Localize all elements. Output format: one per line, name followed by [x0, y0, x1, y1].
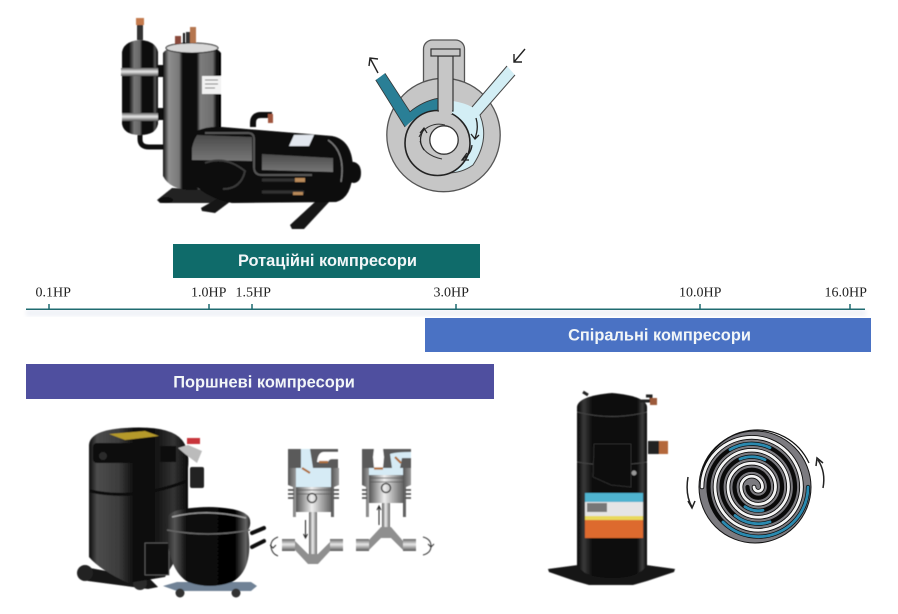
gray disc — [699, 431, 811, 543]
flow arrows — [462, 118, 479, 160]
crankshaft — [368, 527, 403, 551]
terminal box — [593, 444, 631, 487]
label 16.0HP: 16.0HP — [824, 286, 867, 300]
cylinder head — [288, 449, 338, 468]
cylinder walls — [288, 468, 296, 517]
rotary compressor photo — [121, 18, 361, 229]
label 0.1HP: 0.1HP — [36, 286, 71, 300]
cylinder walls — [362, 468, 369, 517]
piston — [296, 487, 331, 512]
crankshaft — [295, 541, 331, 564]
bar: piston compressors — [26, 364, 494, 399]
bar: rotary compressors — [173, 244, 480, 278]
outlet arrow — [369, 58, 378, 73]
label 1.0HP: 1.0HP — [191, 286, 227, 300]
shaft eccentric — [430, 126, 458, 154]
rotation arrow — [270, 537, 278, 556]
reciprocating compressors photo — [77, 428, 264, 598]
rotation arrow — [423, 537, 434, 555]
orbiting scroll black — [708, 444, 808, 537]
outlet channel teal — [376, 73, 438, 127]
base plate — [548, 565, 675, 585]
body — [577, 393, 647, 578]
bar: rotary compressors: Ротаційні компресори — [238, 252, 417, 270]
bar: piston compressors: Поршневі компресори — [173, 374, 355, 392]
rotation arrow — [420, 128, 427, 150]
scroll compressor photo — [548, 392, 675, 585]
fixed scroll black and white — [702, 437, 802, 530]
rotary compressor diagram — [369, 40, 525, 192]
connecting rod — [382, 503, 390, 531]
gas chamber — [369, 468, 403, 475]
gas chamber — [296, 468, 331, 487]
right rotation arrow — [816, 458, 824, 488]
bar: scroll compressors — [425, 318, 871, 352]
small compressor — [145, 507, 264, 598]
piston diagram: intake stroke — [270, 449, 343, 564]
piston diagram: compression stroke — [356, 449, 434, 555]
bar: scroll compressors: Спіральні компресори — [568, 326, 751, 344]
rotor ring — [405, 110, 470, 176]
capacity axis — [26, 286, 867, 316]
inlet channel light blue — [436, 66, 515, 173]
inlet arrow — [514, 49, 525, 62]
left rotation arrow — [687, 477, 695, 508]
scroll mechanism diagram — [687, 430, 824, 543]
outer casing — [387, 78, 500, 192]
intake and exhaust channels — [373, 449, 384, 468]
vertical tank — [157, 27, 224, 203]
connecting rod — [309, 512, 317, 554]
accumulator tank — [121, 18, 166, 147]
fittings — [583, 392, 651, 401]
blue scroll segments — [723, 444, 808, 537]
horizontal tank — [183, 114, 361, 229]
outer casing line — [701, 430, 809, 478]
piston — [369, 475, 403, 503]
intake and exhaust channels — [301, 449, 313, 468]
label 3.0HP: 3.0HP — [434, 286, 469, 300]
vane — [438, 56, 453, 111]
label 1.5HP: 1.5HP — [236, 286, 271, 300]
label 10.0HP: 10.0HP — [679, 286, 722, 300]
large compressor — [77, 428, 204, 590]
cylinder head — [362, 449, 411, 468]
housing tab — [424, 40, 464, 90]
product label — [585, 493, 643, 538]
